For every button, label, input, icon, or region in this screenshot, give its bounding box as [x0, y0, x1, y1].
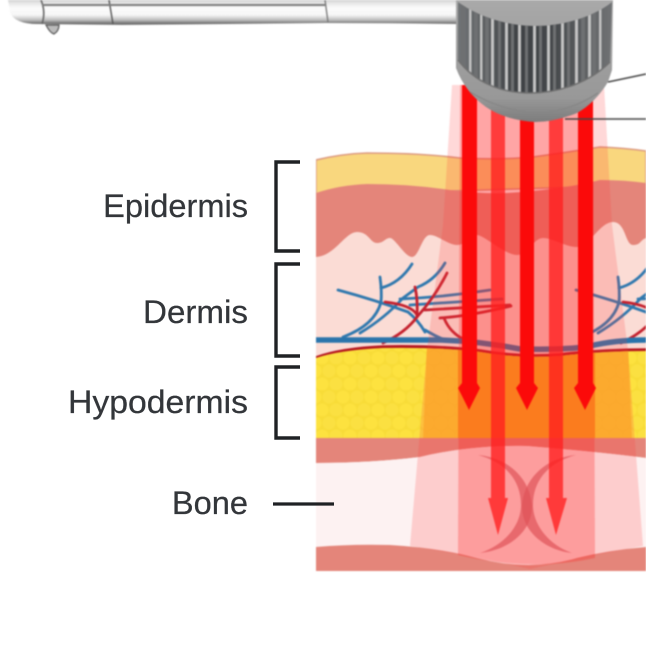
label: Epidermis: Epidermis [103, 187, 248, 224]
epidermis yellow layer [316, 147, 646, 195]
blood vessels [316, 263, 646, 358]
short solid arrow left [458, 85, 480, 410]
short solid arrow right [574, 85, 596, 410]
bracket: Hypodermis [276, 367, 300, 438]
skin cross-section [316, 147, 646, 572]
bone [316, 446, 646, 565]
label: Bone: Bone [172, 484, 248, 521]
long translucent arrow left [488, 85, 508, 535]
bracket: Epidermis [276, 162, 300, 251]
label: Dermis: Dermis [143, 293, 248, 330]
pointer: Bone [273, 502, 334, 506]
crescent bone joint [478, 455, 576, 553]
lower band [316, 545, 646, 571]
connective band [316, 438, 646, 463]
epidermis lower layer [316, 180, 646, 262]
bracket: Dermis [276, 264, 300, 356]
inner light beam [458, 85, 595, 564]
handpiece handle [8, 0, 460, 34]
label: Hypodermis: Hypodermis [68, 383, 248, 420]
leader lines [565, 74, 646, 119]
outer light beam [410, 85, 643, 569]
dermis [316, 222, 646, 358]
beam glow over fat [423, 345, 632, 440]
long translucent arrow right [546, 85, 567, 535]
hypodermis fat [316, 348, 646, 438]
heat-sink ribs [457, 2, 612, 93]
laser head [450, 0, 620, 122]
short solid arrow middle [516, 85, 538, 410]
